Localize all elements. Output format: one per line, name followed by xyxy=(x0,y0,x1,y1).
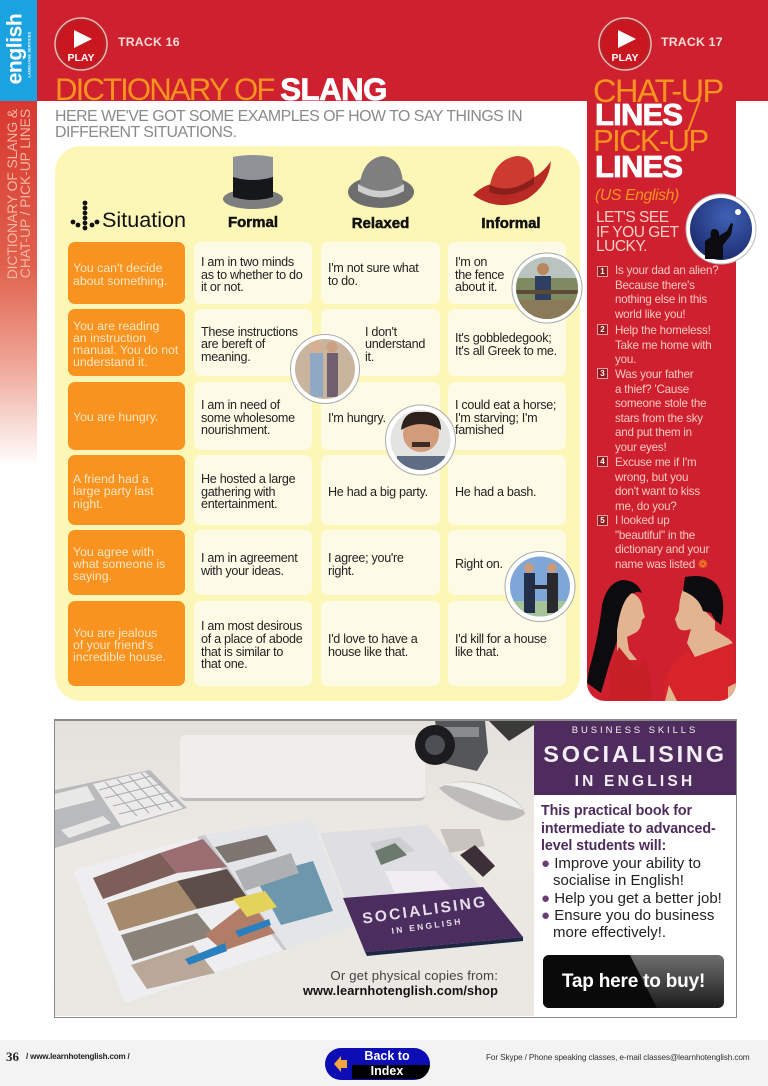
magazine and booklet xyxy=(73,825,523,1003)
line 2 xyxy=(615,324,711,366)
side tab xyxy=(0,101,37,466)
physical copies text: www.learnhotenglish.com/shop xyxy=(303,983,498,998)
row 3 relaxed xyxy=(321,382,440,450)
subheading xyxy=(596,209,679,255)
column heading: relaxed: Relaxed xyxy=(352,215,409,232)
number 3: 3 xyxy=(600,369,605,378)
button text: Index xyxy=(371,1064,403,1078)
row 6 formal: that is similar to xyxy=(201,644,283,658)
row 2 situation xyxy=(68,309,185,376)
row 3 formal: nourishment. xyxy=(201,423,270,437)
line 4: wrong, but you xyxy=(615,471,688,484)
row 6 informal: like that. xyxy=(455,644,499,658)
row 6 relaxed: I'd love to have a xyxy=(328,632,417,646)
line 5: "beautiful" in the xyxy=(615,529,695,542)
heading slash xyxy=(687,99,701,132)
subheading: IF YOU GET xyxy=(596,224,679,241)
row 3 formal: some wholesome xyxy=(201,411,295,425)
row 1 informal xyxy=(448,242,566,304)
us english note: (US English) xyxy=(595,187,679,204)
row 3 informal: I'm starving; I'm xyxy=(455,411,537,425)
row 3 formal: I am in need of xyxy=(201,398,280,412)
line 4: don't want to kiss xyxy=(615,485,700,498)
line 3 xyxy=(615,368,706,454)
row 1 relaxed: to do. xyxy=(328,274,358,288)
button lower stripe xyxy=(352,1065,430,1079)
physical copies text: Or get physical copies from: xyxy=(330,968,498,983)
footer url: / www.learnhotenglish.com / xyxy=(26,1052,130,1061)
line 2: Help the homeless! xyxy=(615,324,711,337)
row 2 formal: meaning. xyxy=(201,350,250,364)
row 1 formal: as to whether to do xyxy=(201,268,302,282)
row 4 relaxed: He had a big party. xyxy=(328,485,428,499)
icon: top hat xyxy=(223,155,283,209)
row 3 situation: You are hungry. xyxy=(73,410,158,424)
row 3 formal xyxy=(194,382,312,450)
side tab text xyxy=(4,109,32,279)
row 5 situation: what someone is xyxy=(73,557,165,571)
row 5 formal: I am in agreement xyxy=(201,551,297,565)
laptop xyxy=(180,735,425,801)
row 6 relaxed xyxy=(321,601,440,686)
logo text: LANGUAGE SERVICES xyxy=(26,32,32,78)
subheading: LET'S SEE xyxy=(596,209,669,226)
icon: grey fedora xyxy=(348,156,414,208)
row 3 informal: famished xyxy=(455,423,504,437)
line 3: a thief? 'Cause xyxy=(615,383,689,396)
row 4 formal xyxy=(194,455,312,525)
play button: track 17 xyxy=(598,17,652,71)
row 4 situation: large party last xyxy=(73,484,154,498)
physical copies text xyxy=(303,968,498,998)
subheading: LUCKY. xyxy=(596,238,647,255)
track 16 label: TRACK 16 xyxy=(118,35,180,49)
camera xyxy=(415,721,488,771)
intro text: DIFFERENT SITUATIONS. xyxy=(55,124,236,140)
row 3 relaxed: I'm hungry. xyxy=(328,411,386,425)
bullet 3: ● Ensure you do business xyxy=(541,907,714,924)
row 6 formal xyxy=(194,601,312,686)
advert photo xyxy=(55,721,534,1016)
row 4 formal: gathering with xyxy=(201,485,275,499)
row 1 informal: the fence xyxy=(455,268,504,282)
intro text xyxy=(55,108,522,140)
line 5: name was listed ❁ xyxy=(615,558,708,571)
situation label: Situation xyxy=(102,207,186,232)
number 2 xyxy=(597,324,608,335)
row 2 informal: It's gobbledegook; xyxy=(455,331,551,345)
line 3: your eyes! xyxy=(615,441,666,454)
row 6 situation: of your friend's xyxy=(73,638,153,652)
number 1 xyxy=(597,266,608,277)
row 1 informal: I'm on xyxy=(455,255,487,269)
keyboard xyxy=(55,770,187,848)
row 2 relaxed xyxy=(321,309,440,376)
row 1 relaxed xyxy=(321,242,440,304)
panel: chat-up lines xyxy=(587,101,736,701)
logo tab xyxy=(0,0,37,101)
row 2 situation: an instruction xyxy=(73,331,146,345)
advert headline: SOCIALISING xyxy=(543,741,727,767)
button text: Back to xyxy=(364,1049,410,1063)
logo text: english xyxy=(4,14,26,84)
number 5 xyxy=(597,515,608,526)
bullet 1 xyxy=(541,855,701,889)
row 1 formal: it or not. xyxy=(201,280,244,294)
row 1 informal: about it. xyxy=(455,280,497,294)
row 6 situation xyxy=(68,601,185,686)
row 5 situation xyxy=(68,530,185,595)
row 3 informal xyxy=(448,382,566,450)
panel: slang table xyxy=(55,146,580,701)
row 4 situation xyxy=(68,455,185,525)
row 6 situation: incredible house. xyxy=(73,650,166,664)
advert subheadline: IN ENGLISH xyxy=(575,773,695,790)
row 4 relaxed xyxy=(321,455,440,525)
row 1 formal: I am in two minds xyxy=(201,255,294,269)
row 2 relaxed: it. xyxy=(365,350,374,364)
line 4: Excuse me if I'm xyxy=(615,456,696,469)
row 2 relaxed: I don't xyxy=(365,325,397,339)
row 1 formal xyxy=(194,242,312,304)
bullet 1: ● Improve your ability to xyxy=(541,855,701,872)
photo: two people xyxy=(290,334,360,404)
icon: red cowboy hat xyxy=(473,156,551,206)
number 5: 5 xyxy=(600,516,605,525)
row 2 relaxed: understand xyxy=(365,337,425,351)
icon: dotted arrow xyxy=(70,200,100,230)
line 4: me, do you? xyxy=(615,500,677,513)
photo: stargazer xyxy=(686,194,756,264)
row 5 relaxed: I agree; you're xyxy=(328,551,404,565)
heading line 3: PICK-UP xyxy=(593,123,708,158)
row 4 informal xyxy=(448,455,566,525)
row 4 formal: entertainment. xyxy=(201,497,277,511)
back to index button xyxy=(325,1048,430,1080)
mouse xyxy=(439,782,525,820)
column heading: formal: Formal xyxy=(228,214,278,231)
row 3 situation xyxy=(68,382,185,450)
row 6 informal: I'd kill for a house xyxy=(455,632,547,646)
photo: man on fence xyxy=(512,252,582,324)
advert bullets xyxy=(541,855,722,941)
line 2: you. xyxy=(615,353,636,366)
row 4 situation: A friend had a xyxy=(73,472,149,486)
advert intro: This practical book for intermediate to advanced-level students will: xyxy=(541,803,716,854)
line 1: world like you! xyxy=(615,308,685,321)
heading line 4: LINES xyxy=(595,149,682,184)
line 3: stars from the sky xyxy=(615,412,703,425)
row 6 formal: that one. xyxy=(201,657,247,671)
bullet 2: ● Help you get a better job! xyxy=(541,890,722,907)
row 1 situation: You can't decide xyxy=(73,261,162,275)
number 2: 2 xyxy=(600,325,605,334)
line 1: Is your dad an alien? xyxy=(615,264,718,277)
header band xyxy=(37,0,768,101)
illustration: couple xyxy=(587,576,736,701)
line 5: I looked up xyxy=(615,514,670,527)
bullet 1: socialise in English! xyxy=(553,872,684,889)
row 2 situation: understand it. xyxy=(73,355,148,369)
row 3 informal: I could eat a horse; xyxy=(455,398,556,412)
row 5 formal xyxy=(194,530,312,595)
row 6 relaxed: house like that. xyxy=(328,644,408,658)
line 1 xyxy=(615,264,718,321)
icon: back arrow xyxy=(334,1056,347,1072)
row 5 informal: Right on. xyxy=(455,557,503,571)
row 2 formal: are bereft of xyxy=(201,337,265,351)
number 3 xyxy=(597,368,608,379)
situation heading xyxy=(70,200,186,232)
advert title block xyxy=(534,721,736,795)
row 2 informal: It's all Greek to me. xyxy=(455,344,557,358)
button text xyxy=(364,1049,410,1078)
line 1: nothing else in this xyxy=(615,293,707,306)
row 4 informal: He had a bash. xyxy=(455,485,536,499)
page number: 36 xyxy=(6,1049,19,1064)
number 4 xyxy=(597,456,608,467)
row 5 informal xyxy=(448,530,566,595)
panel: advert xyxy=(54,720,737,1018)
button dark wedge xyxy=(543,955,657,1008)
play button: track 16: PLAY xyxy=(67,52,95,64)
row 6 formal: I am most desirous xyxy=(201,619,302,633)
footer band xyxy=(0,1040,768,1086)
heading line 2: LINES xyxy=(595,97,682,132)
photo: handshake xyxy=(504,551,576,622)
row 2 formal: These instructions xyxy=(201,325,298,339)
row 1 situation: about something. xyxy=(73,274,167,288)
row 2 situation: manual. You do not xyxy=(73,343,178,357)
line 5: dictionary and your xyxy=(615,543,709,556)
line 3: and put them in xyxy=(615,426,692,439)
bullet 3: more effectively!. xyxy=(553,924,666,941)
row 2 formal xyxy=(194,309,312,376)
bullet 3 xyxy=(541,907,714,941)
line 5 xyxy=(615,514,710,571)
row 2 informal xyxy=(448,309,566,376)
row 5 relaxed: right. xyxy=(328,564,354,578)
play button: track 16 xyxy=(54,17,108,71)
row 5 relaxed xyxy=(321,530,440,595)
line 3: someone stole the xyxy=(615,397,706,410)
row 5 formal: with your ideas. xyxy=(201,564,284,578)
number 1: 1 xyxy=(600,267,605,276)
footer contact: For Skype / Phone speaking classes, e-mail classes@learnhotenglish.com xyxy=(486,1052,750,1062)
heading line 1: CHAT-UP xyxy=(593,73,723,109)
line 4 xyxy=(615,456,700,513)
column heading: informal: Informal xyxy=(481,215,541,232)
line 1: Because there's xyxy=(615,279,695,292)
cover title: SOCIALISING xyxy=(361,893,488,928)
row 2 situation: You are reading xyxy=(73,319,159,333)
row 6 informal xyxy=(448,601,566,686)
buy button xyxy=(543,955,724,1008)
side tab text: CHAT-UP / PICK-UP LINES xyxy=(16,109,32,278)
row 1 situation xyxy=(68,242,185,304)
advert eyebrow: BUSINESS SKILLS xyxy=(572,725,698,736)
row 5 situation: You agree with xyxy=(73,545,154,559)
play button: track 17: PLAY xyxy=(611,52,639,64)
intro text: HERE WE'VE GOT SOME EXAMPLES OF HOW TO SAY THINGS IN xyxy=(55,108,522,125)
number 4: 4 xyxy=(600,457,605,466)
cover title: IN ENGLISH xyxy=(391,916,463,936)
row 1 relaxed: I'm not sure what xyxy=(328,261,418,275)
row 4 situation: night. xyxy=(73,497,103,511)
photo: worried man xyxy=(385,404,456,476)
row 4 formal: He hosted a large xyxy=(201,472,295,486)
row 6 formal: of a place of abode xyxy=(201,632,302,646)
dark wedge xyxy=(489,721,534,741)
line 3: Was your father xyxy=(615,368,693,381)
button label: Tap here to buy! xyxy=(562,971,705,992)
line 2: Take me home with xyxy=(615,339,711,352)
row 6 situation: You are jealous xyxy=(73,626,157,640)
side tab text: DICTIONARY OF SLANG & xyxy=(4,109,20,279)
row 5 situation: saying. xyxy=(73,569,112,583)
chat-up heading xyxy=(593,73,723,184)
track 17 label: TRACK 17 xyxy=(661,35,723,49)
